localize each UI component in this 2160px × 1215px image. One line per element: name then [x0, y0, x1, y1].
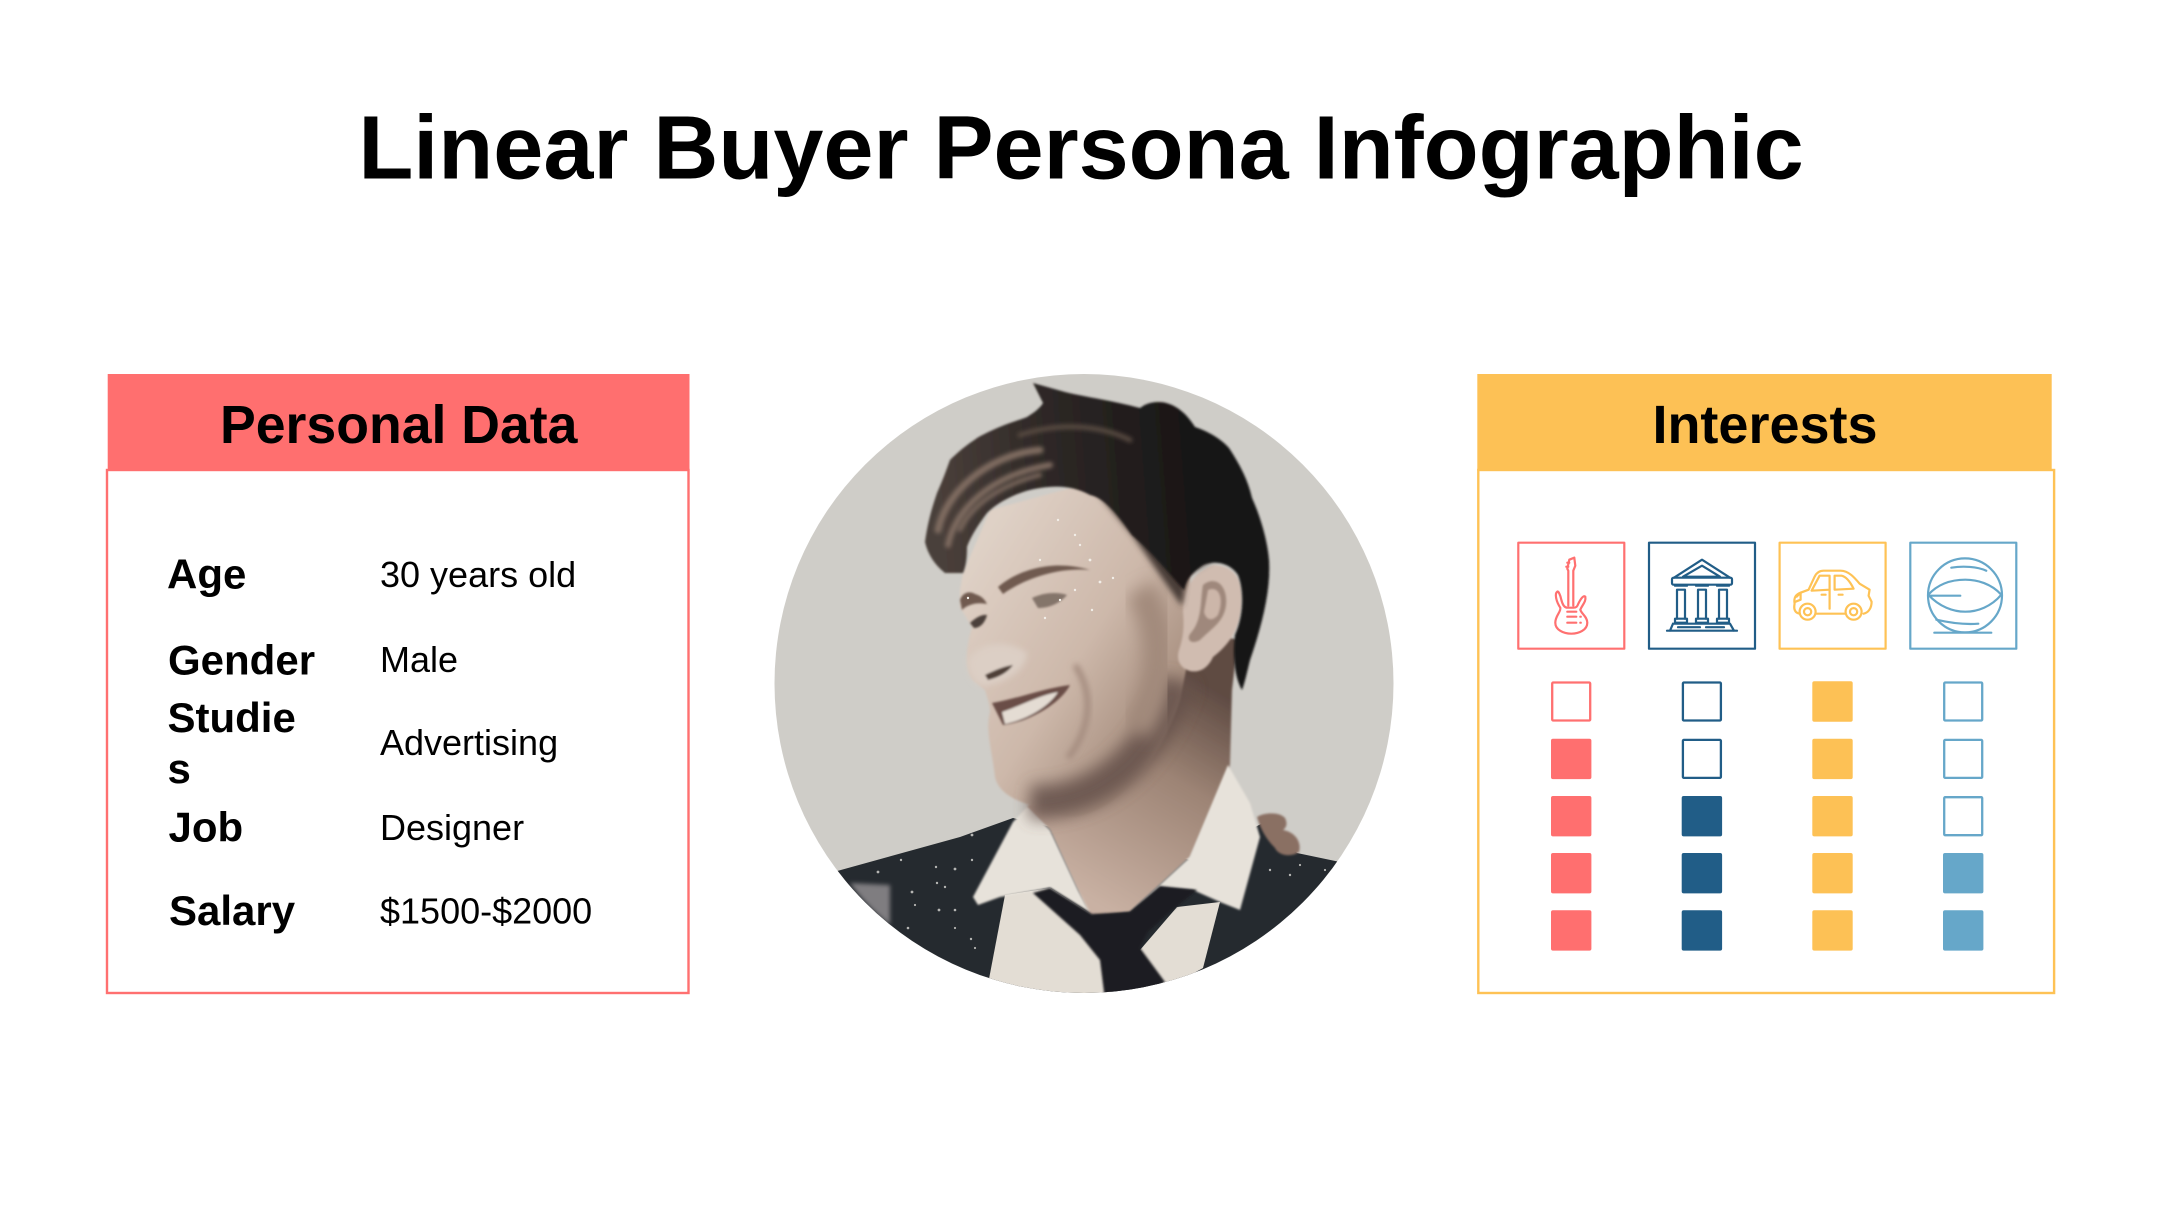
row: studies: Studie [168, 694, 296, 741]
rating: car 5 of 5 [1812, 681, 1853, 951]
brows [960, 565, 1090, 610]
row: gender [168, 636, 458, 684]
eyes [970, 593, 1067, 628]
row: job [168, 804, 524, 850]
row: age: Age [167, 550, 246, 597]
panel: personal data [107, 374, 690, 993]
hair [925, 383, 1269, 690]
title: Linear Buyer Persona Infographic [358, 98, 1804, 198]
jacket glitter [877, 834, 1326, 949]
row: age [167, 550, 576, 597]
rating: museum 3 of 5 [1682, 682, 1722, 951]
cheek shading [1135, 590, 1158, 730]
heading: personal data: Personal Data [220, 395, 579, 455]
collars [973, 765, 1260, 913]
heading: personal data [108, 374, 689, 471]
mouth [992, 685, 1070, 725]
icon: museum building [1649, 543, 1755, 649]
icon: car [1780, 543, 1886, 649]
neck [1027, 630, 1238, 917]
icon: guitar [1518, 543, 1624, 649]
smile line [1068, 665, 1088, 758]
row: studies [168, 694, 558, 792]
ear [1178, 565, 1242, 671]
heading: interests [1477, 374, 2052, 471]
row: studies: s [168, 745, 191, 792]
hair highlights [938, 427, 1130, 545]
jacket [838, 818, 1338, 993]
head [960, 480, 1190, 817]
temple hair fade [1096, 498, 1214, 607]
jaw stubble shadow [1030, 680, 1178, 802]
row: gender: Gender [168, 636, 315, 684]
face glitter [967, 519, 1114, 619]
heading: interests: Interests [1652, 395, 1878, 455]
shirt front [985, 888, 1220, 1000]
row: salary: Salary [169, 887, 296, 934]
icon: ball [1910, 543, 2016, 649]
panel: interests [1477, 374, 2054, 993]
rating: ball 2 of 5 [1943, 682, 1983, 951]
nose [972, 645, 1026, 685]
hand [1257, 813, 1300, 855]
row: gender: Male [380, 639, 458, 680]
row: salary: $1500-$2000 [380, 890, 592, 932]
rating: guitar 4 of 5 [1551, 682, 1591, 951]
row: job: Job [168, 804, 243, 850]
jacket patch [850, 883, 890, 925]
row: salary [169, 887, 592, 934]
row: job: Designer [380, 807, 524, 848]
row: studies: Advertising [380, 722, 558, 763]
row: age: 30 years old [380, 554, 576, 595]
tie [1033, 886, 1197, 1000]
photo: smiling man in circle [770, 370, 1400, 1010]
